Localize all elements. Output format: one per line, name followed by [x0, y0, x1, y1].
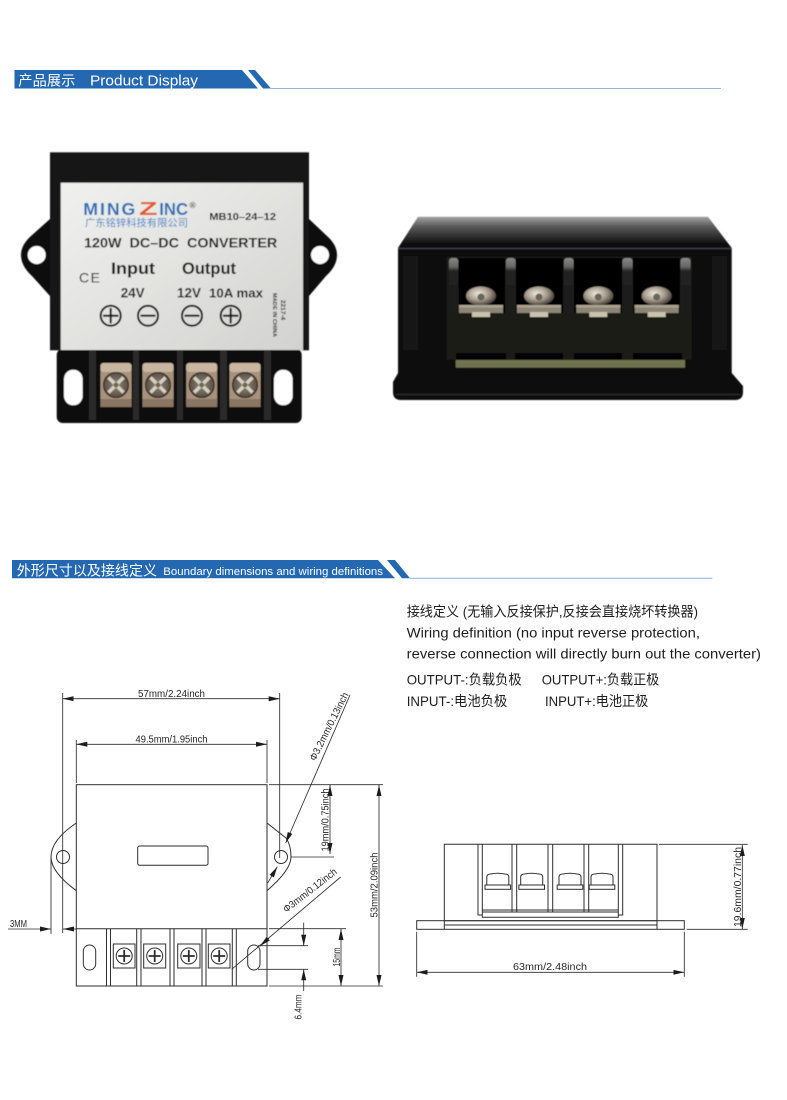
- dimension: slot 3mm: [232, 867, 341, 969]
- model number: MB10–24–12: [209, 212, 276, 223]
- section header: Product Display: [14, 70, 721, 90]
- input and output labels: [111, 259, 237, 278]
- polarity symbols: [101, 306, 241, 326]
- section header: Product Display: 产品展示: [18, 74, 75, 90]
- front face: [398, 248, 732, 374]
- dimension: 63mm: 63mm/2.48inch: [513, 962, 587, 973]
- terminal ribs: [89, 350, 271, 420]
- section header: Product Display: Product Display: [90, 74, 199, 90]
- brand logo: Z: [139, 199, 158, 219]
- ear holes: [28, 246, 329, 264]
- input and output labels: Input: [111, 259, 155, 278]
- terminal block outline: [478, 844, 623, 917]
- housing outline: [76, 785, 267, 986]
- batch number: 2217-4: [279, 300, 286, 320]
- wiring definition text: 接线定义 (无输入反接保护,反接会直接烧坏转换器): [407, 604, 698, 620]
- dimension: hole 3.2mm: Φ3.2mm/0.13inch: [308, 691, 351, 763]
- terminal block: [89, 350, 271, 420]
- dimension drawing: top view: [8, 689, 383, 1020]
- circuit board strip: [456, 360, 685, 368]
- wiring definition text: OUTPUT-:负载负极: [407, 671, 522, 687]
- dimension: hole 3.2mm: [268, 691, 351, 883]
- dimension: 19mm: [291, 785, 334, 857]
- dimension: 3mm: 3MM: [10, 919, 27, 930]
- dimension: 3mm: [8, 857, 76, 934]
- terminal block: [447, 257, 692, 360]
- dimension: 63mm: [417, 932, 684, 977]
- product label: [61, 183, 303, 350]
- wiring definition text: [407, 604, 761, 709]
- voltage ratings: 24V: [121, 285, 145, 300]
- registered mark: ®: [190, 200, 196, 210]
- company name: 广东铭锌科技有限公司: [85, 217, 188, 230]
- dimension: slot 3mm: Φ3mm/0.12inch: [281, 867, 339, 915]
- label window: [138, 846, 208, 865]
- dimension drawing: front view: [417, 844, 748, 977]
- terminal screws: [100, 363, 260, 407]
- terminal ribs: [449, 258, 690, 313]
- dimension: 57mm: [63, 689, 280, 933]
- dimension: 57mm: 57mm/2.24inch: [138, 689, 205, 700]
- CE mark: CE: [79, 270, 100, 286]
- terminal bottom slots: [456, 353, 682, 360]
- base plate: [417, 921, 684, 929]
- dimension: 19.6mm: [659, 844, 748, 929]
- lid front edge: [398, 248, 732, 250]
- brand logo: INC: [159, 199, 188, 219]
- made in china: MADE IN CHINA: [271, 293, 277, 338]
- converter body: [50, 152, 309, 350]
- dimension: 15mm: [269, 929, 346, 986]
- wiring definition text: INPUT-:电池负极: [407, 693, 507, 709]
- converter title: 120W DC–DC CONVERTER: [84, 234, 277, 250]
- base slots: [83, 945, 260, 970]
- input and output labels: Output: [182, 260, 237, 278]
- terminal base: [57, 349, 302, 423]
- wiring definition text: reverse connection will directly burn out the converter): [407, 645, 761, 661]
- mounting ears: [51, 823, 291, 891]
- wiring definition text: Wiring definition (no input reverse protection,: [407, 625, 700, 641]
- dimension: 49.5mm: [76, 734, 267, 783]
- wiring definition text: INPUT+:电池正极: [545, 693, 648, 709]
- section header: Boundary dimensions and wiring definitions: [12, 560, 712, 578]
- base slots: [64, 370, 293, 405]
- voltage ratings: [121, 285, 264, 300]
- dimension: 53mm: 53mm/2.09inch: [370, 852, 380, 918]
- housing outline: [444, 844, 657, 921]
- dimension: 6.4mm: 6.4mm: [294, 994, 304, 1020]
- flange: [393, 373, 743, 400]
- product photo: converter top view: [21, 152, 337, 423]
- section header: Boundary dimensions and wiring definitions: 外形尺寸以及接线定义: [17, 562, 157, 578]
- terminal cavities: [458, 258, 680, 313]
- terminal screws: [113, 944, 230, 968]
- dimension: 19.6mm: 19.6mm/0.77inch: [733, 847, 744, 927]
- dimension: 15mm: 15mm: [332, 948, 343, 966]
- terminal dividers: [106, 929, 236, 986]
- dimension: 19mm: 19mm/0.75inch: [320, 788, 332, 852]
- brand logo: [83, 199, 188, 219]
- lid: [398, 217, 732, 248]
- dimension: 53mm: [269, 785, 383, 986]
- voltage ratings: 10A max: [209, 285, 264, 300]
- wiring definition text: OUTPUT+:负载正极: [542, 671, 659, 687]
- voltage ratings: 12V: [177, 285, 201, 300]
- brand logo: MING: [83, 199, 135, 219]
- flange highlight: [396, 394, 740, 396]
- terminal screws: [485, 873, 615, 889]
- mounting ears: [21, 219, 337, 296]
- product photo: converter terminal view: [393, 217, 743, 400]
- dimension: 49.5mm: 49.5mm/1.95inch: [136, 734, 208, 746]
- screws: [459, 286, 679, 317]
- dimension: 6.4mm: [258, 923, 308, 1020]
- section header: Boundary dimensions and wiring definitions: Boundary dimensions and wiring definitions: [163, 566, 384, 578]
- front panel side shading: [403, 256, 727, 350]
